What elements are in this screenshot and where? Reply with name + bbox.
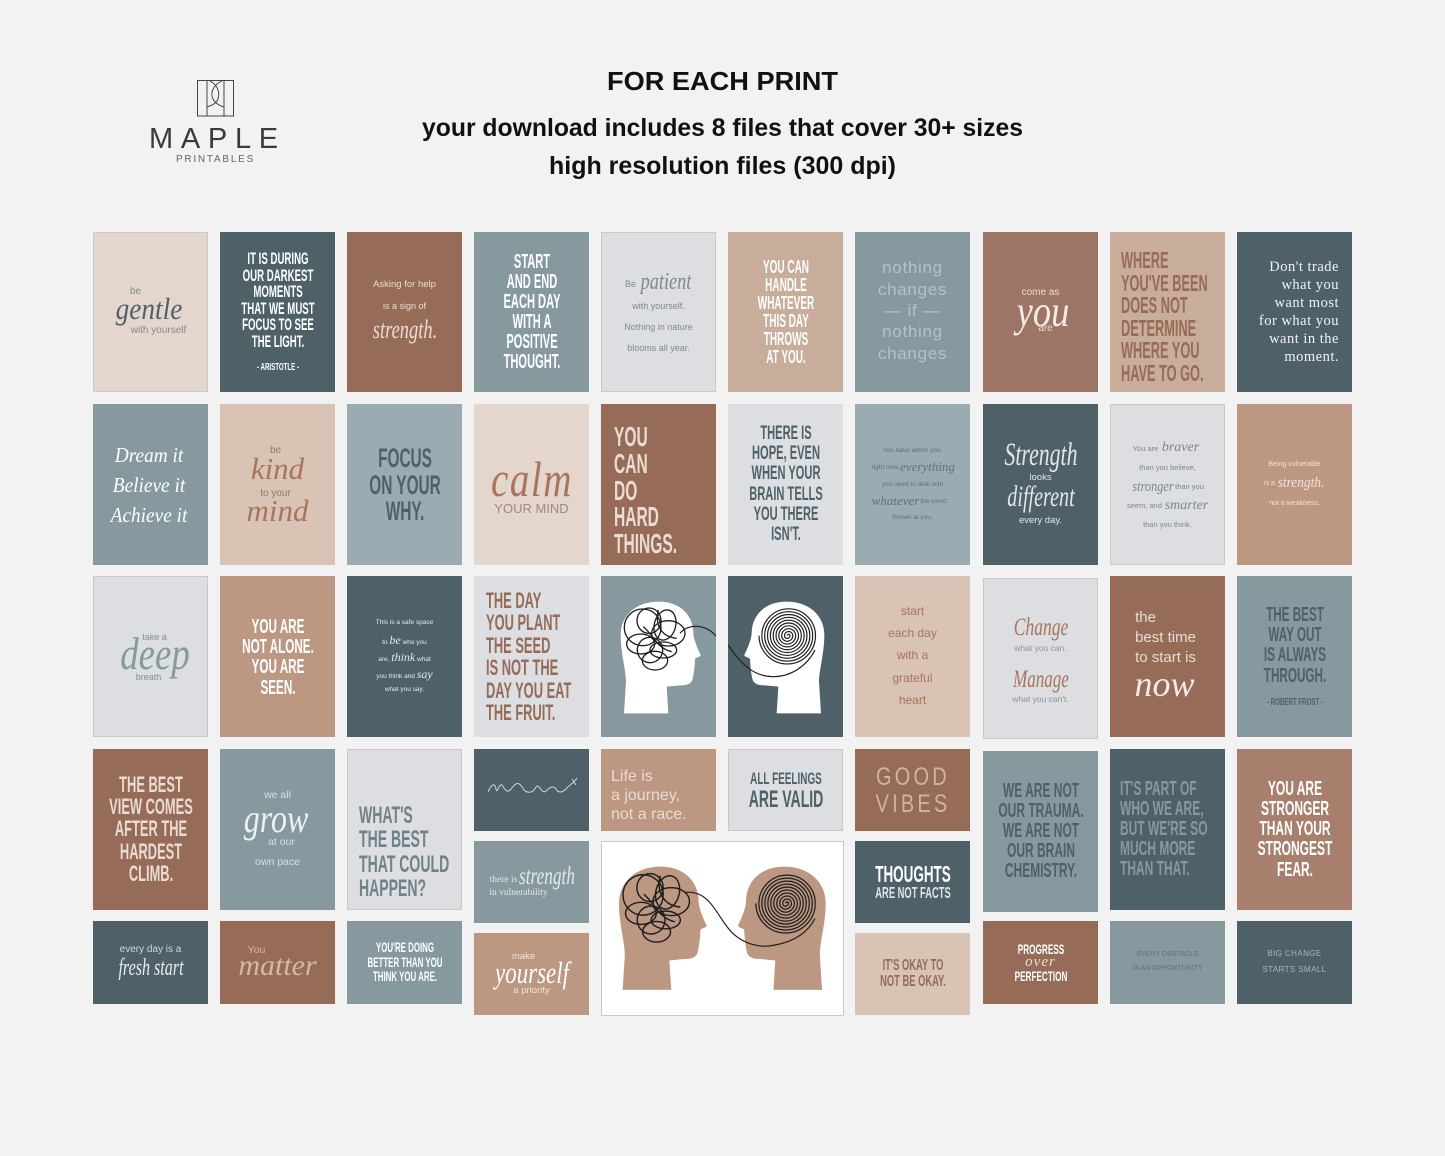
print: where you've been: HAVE TO GO. bbox=[1121, 360, 1204, 386]
print: don't trade: for what you bbox=[1259, 313, 1339, 329]
print: asking for help: strength. bbox=[372, 315, 437, 344]
print: we all grow: at our bbox=[268, 836, 295, 848]
wordmark MAPLE: MAPLE bbox=[149, 123, 286, 155]
print: you can handle whatever: AT YOU. bbox=[766, 347, 805, 367]
print: you are stronger: STRONGEST bbox=[1257, 838, 1332, 860]
print: it's part of who we are: THAN THAT. bbox=[1120, 858, 1190, 880]
subtitle: resolution: high resolution files (300 dpi) bbox=[549, 152, 896, 180]
print: make yourself a priority: a priority bbox=[513, 985, 550, 996]
print: dream it believe it achieve it bbox=[93, 404, 208, 565]
print: you can do hard things: CAN bbox=[614, 448, 648, 479]
print: there is hope: WHEN YOUR bbox=[751, 463, 820, 484]
print: it's part of who we are bbox=[1110, 749, 1225, 910]
print: there is strength in vulnerability: strength bbox=[519, 863, 574, 890]
print: you are stronger: FEAR. bbox=[1276, 859, 1312, 881]
print: the best way out: IS ALWAYS bbox=[1263, 644, 1326, 666]
print: start and end each day: START bbox=[513, 251, 550, 273]
print: all feelings are valid: ARE VALID bbox=[748, 786, 823, 813]
print: start each day with a grateful heart bbox=[855, 576, 970, 737]
print: the day you plant the seed: IS NOT THE bbox=[486, 655, 558, 680]
print: you are braver: stronger bbox=[1132, 479, 1173, 495]
print: you are not alone: YOU ARE bbox=[251, 656, 304, 678]
print: every obstacle bbox=[1110, 921, 1225, 1004]
print: change manage bbox=[983, 578, 1098, 739]
print: progress over perfection: PROGRESS bbox=[1017, 941, 1064, 957]
print: you have within you: the world bbox=[920, 498, 947, 505]
print: you can do hard things bbox=[601, 404, 716, 565]
print: dream it believe it achieve it: Dream it bbox=[114, 443, 183, 467]
print: the best way out: WAY OUT bbox=[1268, 624, 1321, 646]
print: it's part of who we are: IT'S PART OF bbox=[1120, 778, 1197, 800]
print: asking for help: is a sign of bbox=[383, 301, 426, 311]
print: you can handle whatever: THROWS bbox=[763, 329, 808, 349]
print: the day you plant the seed: YOU PLANT bbox=[486, 610, 560, 635]
print: be kind to your mind: mind bbox=[246, 493, 308, 528]
print: we are not our trauma bbox=[983, 751, 1098, 912]
print: you can do hard things: YOU bbox=[614, 421, 648, 452]
print: we are not our trauma: WE ARE NOT bbox=[1002, 820, 1079, 842]
print: start each day with a grateful heart: with a bbox=[897, 648, 928, 662]
print: the best view bbox=[93, 749, 208, 910]
print: heads connected illustration bbox=[601, 841, 844, 1016]
print: you are stronger: STRONGER bbox=[1260, 798, 1329, 820]
print: you can handle whatever: HANDLE bbox=[765, 275, 806, 295]
print: you can do hard things: THINGS. bbox=[614, 528, 677, 559]
print: Aristotle quote: - ARISTOTLE - bbox=[257, 361, 298, 373]
print: you are stronger: YOU ARE bbox=[1267, 778, 1322, 800]
print: be patient: patient bbox=[640, 269, 691, 295]
print: where you've been: WHERE bbox=[1121, 247, 1169, 273]
subtitle: files and sizes: your download includes 8 files that cover 30+ sizes bbox=[422, 114, 1023, 142]
print: don't trade: want in the bbox=[1269, 331, 1339, 347]
print: be gentle: gentle bbox=[115, 291, 182, 326]
print: the best way out bbox=[1237, 576, 1352, 737]
print: the best view: THE BEST bbox=[119, 772, 182, 797]
print: start each day with a grateful heart: grateful bbox=[892, 671, 933, 685]
print: there is strength in vulnerability: there is bbox=[490, 875, 517, 885]
print: script squiggle bbox=[474, 749, 589, 831]
print: strength looks different: different bbox=[1007, 480, 1074, 513]
print: you can handle whatever: THIS DAY bbox=[763, 311, 808, 331]
illustration: tangled and calm heads bbox=[619, 866, 826, 990]
print: you matter: matter bbox=[238, 949, 317, 982]
print: the best way out: THROUGH. bbox=[1263, 665, 1326, 687]
print: you are stronger: THAN YOUR bbox=[1259, 818, 1330, 840]
print: where you've been bbox=[1110, 232, 1225, 392]
print: thoughts are not facts: THOUGHTS bbox=[875, 861, 950, 887]
print: you're doing better: THINK YOU ARE. bbox=[372, 969, 437, 984]
print: big change starts small bbox=[1237, 921, 1352, 1004]
print: where you've been: DETERMINE bbox=[1121, 315, 1196, 341]
print: calm your mind: calm bbox=[490, 451, 573, 507]
print: the best way out: THE BEST bbox=[1266, 604, 1323, 626]
heading text bbox=[422, 66, 1023, 180]
print: thoughts are not facts: ARE NOT FACTS bbox=[875, 885, 950, 902]
print: being vulnerable bbox=[1237, 404, 1352, 565]
print: every obstacle: EVERY OBSTACLE bbox=[1136, 951, 1199, 958]
print: every obstacle: IS AN OPPORTUNITY bbox=[1132, 965, 1203, 972]
print: come as you are: are bbox=[1038, 323, 1053, 334]
print: come as you are: you bbox=[1016, 287, 1069, 336]
print: we are not our trauma: CHEMISTRY. bbox=[1004, 860, 1077, 882]
print: start each day with a grateful heart: heart bbox=[899, 693, 926, 707]
print: be kind to your mind: kind bbox=[251, 451, 304, 486]
print: there is hope: THERE IS bbox=[760, 423, 811, 444]
print: every day is a fresh start: fresh start bbox=[118, 955, 183, 981]
print: safe space bbox=[347, 576, 462, 737]
print: the best time to start is now bbox=[1110, 576, 1225, 737]
print: the day you plant the seed: THE FRUIT. bbox=[486, 700, 555, 725]
print: take a deep breath: deep bbox=[120, 628, 189, 679]
print: there is strength in vulnerability bbox=[474, 841, 589, 923]
print: good vibes bbox=[855, 749, 970, 831]
print: change manage: Manage bbox=[1013, 666, 1068, 693]
print: every day is a fresh start: every day is a bbox=[120, 944, 181, 955]
print: the best way out: - ROBERT FROST - bbox=[1267, 696, 1322, 708]
print: we all grow bbox=[220, 749, 335, 910]
print: you are not alone: SEEN. bbox=[260, 677, 295, 699]
print: Aristotle quote bbox=[220, 232, 335, 392]
print: dream it believe it achieve it: Achieve it bbox=[110, 503, 187, 527]
illustration: spiral head bbox=[728, 602, 824, 714]
print: you have within you: you need to deal with bbox=[882, 481, 943, 488]
print: change manage: what you can. bbox=[1014, 643, 1067, 653]
print: progress over perfection bbox=[983, 921, 1098, 1004]
print: you're doing better bbox=[347, 921, 462, 1004]
print: we all grow: we all bbox=[264, 789, 291, 801]
print: focus on your why: FOCUS bbox=[378, 443, 431, 473]
print: all feelings are valid: ALL FEELINGS bbox=[750, 769, 821, 788]
print: make yourself a priority bbox=[474, 933, 589, 1015]
print: you have within you: everything bbox=[900, 459, 955, 474]
print: you matter: You bbox=[248, 944, 265, 956]
print: nothing changes: changes bbox=[878, 344, 947, 363]
print: what's the best: HAPPEN? bbox=[359, 875, 426, 902]
print: safe space: what you say. bbox=[385, 686, 424, 693]
print: nothing changes: nothing bbox=[882, 258, 943, 277]
print: the best view: VIEW COMES bbox=[109, 794, 192, 819]
print: come as you are: come as bbox=[1022, 287, 1059, 298]
print: asking for help: Asking for help bbox=[373, 279, 436, 290]
print: there is hope: YOU THERE bbox=[753, 504, 818, 525]
print: all feelings are valid bbox=[728, 749, 843, 831]
print: it's part of who we are: MUCH MORE bbox=[1120, 838, 1195, 860]
print: asking for help bbox=[347, 232, 462, 392]
print: strength looks different bbox=[983, 404, 1098, 565]
print: you have within you: whatever bbox=[872, 493, 919, 508]
print: the day you plant the seed: THE DAY bbox=[486, 588, 541, 613]
print: there is hope: HOPE, EVEN bbox=[752, 443, 819, 464]
print: be patient: Nothing in nature bbox=[624, 322, 693, 332]
print: don't trade: what you bbox=[1281, 277, 1339, 293]
print: be gentle bbox=[93, 232, 208, 392]
print: we are not our trauma: OUR BRAIN bbox=[1006, 840, 1075, 862]
print: nothing changes: — if — bbox=[884, 301, 941, 320]
print: make yourself a priority: make bbox=[512, 951, 535, 962]
print: you can do hard things: HARD bbox=[614, 501, 659, 532]
print: be patient: blooms all year. bbox=[627, 343, 690, 353]
print: it's okay to not be okay: NOT BE OKAY. bbox=[880, 973, 945, 990]
print: strength looks different: looks bbox=[1029, 472, 1052, 483]
print: there is strength in vulnerability: in vulnerability bbox=[489, 888, 548, 898]
print: change manage: Change bbox=[1013, 614, 1068, 641]
print: start each day with a grateful heart: start bbox=[901, 604, 924, 618]
print: Aristotle quote: OUR DARKEST bbox=[242, 267, 313, 285]
print: Aristotle quote: IT IS DURING bbox=[247, 250, 308, 268]
print: be patient: with yourself. bbox=[632, 301, 685, 311]
print: the day you plant the seed: THE SEED bbox=[486, 633, 550, 658]
print: you can handle whatever: YOU CAN bbox=[762, 257, 809, 277]
print: Aristotle quote: THAT WE MUST bbox=[241, 300, 314, 318]
print: Aristotle quote: MOMENTS bbox=[253, 283, 302, 301]
print: progress over perfection: PERFECTION bbox=[1014, 968, 1067, 984]
print: you have within you bbox=[855, 404, 970, 565]
print: Aristotle quote: FOCUS TO SEE bbox=[242, 316, 313, 334]
print: don't trade bbox=[1237, 232, 1352, 392]
print: be patient bbox=[601, 232, 716, 392]
print: being vulnerable: strength. bbox=[1277, 475, 1324, 491]
print: being vulnerable: is a bbox=[1264, 480, 1275, 487]
print: it's okay to not be okay bbox=[855, 933, 970, 1015]
print: you are stronger bbox=[1237, 749, 1352, 910]
print: safe space: to be who you bbox=[382, 633, 427, 647]
print: you can handle whatever bbox=[728, 232, 843, 392]
print: what's the best: THAT COULD bbox=[359, 851, 449, 878]
print: you are braver: You are bbox=[1133, 444, 1158, 453]
print: what's the best bbox=[347, 749, 462, 910]
print: being vulnerable: Being vulnerable bbox=[1268, 461, 1321, 468]
print: nothing changes: nothing bbox=[882, 322, 943, 341]
print: calm your mind bbox=[474, 404, 589, 565]
print: start and end each day: EACH DAY bbox=[503, 291, 560, 313]
print: the day you plant the seed bbox=[474, 576, 589, 737]
print: it's part of who we are: BUT WE'RE SO bbox=[1120, 818, 1208, 840]
print: the day you plant the seed: DAY YOU EAT bbox=[486, 678, 571, 703]
print: be gentle: with yourself bbox=[131, 325, 186, 336]
print: take a deep breath: breath bbox=[136, 672, 161, 682]
print: there is hope: BRAIN TELLS bbox=[749, 484, 822, 505]
icon: squiggle line bbox=[488, 778, 578, 793]
print: the best view: HARDEST bbox=[119, 839, 182, 864]
print: the best view: AFTER THE bbox=[114, 816, 187, 841]
print: be patient: Be bbox=[625, 279, 636, 289]
print: be kind to your mind: to your bbox=[260, 488, 291, 499]
print: focus on your why: WHY. bbox=[385, 496, 424, 526]
print: you can do hard things: DO bbox=[614, 475, 637, 506]
print: it's part of who we are: WHO WE ARE, bbox=[1120, 798, 1204, 820]
print: what's the best: WHAT'S bbox=[359, 802, 413, 829]
print: head with calm spiral bbox=[728, 576, 843, 737]
title: FOR EACH PRINT bbox=[607, 66, 838, 96]
print: don't trade: Don't trade bbox=[1269, 259, 1339, 275]
print: focus on your why bbox=[347, 404, 462, 565]
print: start and end each day: POSITIVE bbox=[506, 331, 557, 353]
print: focus on your why: ON YOUR bbox=[369, 470, 440, 500]
print: you matter bbox=[220, 921, 335, 1004]
print: you have within you: right now, bbox=[872, 464, 899, 471]
print: the best time to start is now: to start is bbox=[1135, 649, 1196, 666]
print: where you've been: DOES NOT bbox=[1121, 292, 1188, 318]
print: you're doing better: BETTER THAN YOU bbox=[367, 955, 442, 970]
print: where you've been: WHERE YOU bbox=[1121, 337, 1199, 363]
print: you are braver: smarter bbox=[1165, 498, 1208, 513]
print: you are braver: braver bbox=[1162, 440, 1199, 455]
print: be kind to your mind bbox=[220, 404, 335, 565]
print: take a deep breath bbox=[93, 576, 208, 737]
print: the best view: CLIMB. bbox=[128, 861, 173, 886]
print: you are braver: seem, and bbox=[1127, 501, 1162, 510]
print: don't trade: moment. bbox=[1284, 349, 1339, 365]
print: good vibes: GOOD bbox=[876, 763, 949, 791]
print: the best time to start is now: the bbox=[1135, 609, 1156, 626]
print: safe space: you think and say bbox=[376, 667, 433, 681]
logo: Maple Printables bbox=[149, 80, 286, 165]
print: come as you are bbox=[983, 232, 1098, 392]
print: you are braver: than you believe, bbox=[1139, 463, 1196, 472]
print: we all grow: own pace bbox=[255, 856, 300, 868]
logo mark bbox=[197, 80, 234, 116]
print: nothing changes bbox=[855, 232, 970, 392]
print: start and end each day: WITH A bbox=[512, 311, 551, 333]
print: being vulnerable: not a weakness. bbox=[1269, 500, 1320, 507]
print: you are braver: than you think. bbox=[1143, 520, 1192, 529]
print: every day is a fresh start bbox=[93, 921, 208, 1004]
print: start and end each day: THOUGHT. bbox=[503, 351, 560, 373]
print: thoughts are not facts bbox=[855, 841, 970, 923]
print: big change starts small: STARTS SMALL bbox=[1262, 965, 1327, 974]
print: don't trade: want most bbox=[1274, 295, 1339, 311]
print: you are not alone bbox=[220, 576, 335, 737]
print: head with tangled scribble bbox=[601, 576, 716, 737]
print: calm your mind: YOUR MIND bbox=[494, 501, 569, 516]
print: make yourself a priority: yourself bbox=[495, 955, 568, 990]
print: you are not alone: NOT ALONE. bbox=[242, 636, 313, 658]
print: we are not our trauma: OUR TRAUMA. bbox=[998, 800, 1083, 822]
print: start and end each day: AND END bbox=[506, 271, 557, 293]
print: you're doing better: YOU'RE DOING bbox=[375, 940, 434, 955]
print: you can handle whatever: WHATEVER bbox=[757, 293, 814, 313]
print: be kind to your mind: be bbox=[270, 445, 281, 456]
print: safe space: are, think what bbox=[378, 650, 431, 664]
print: start and end each day bbox=[474, 232, 589, 392]
print: you are not alone: YOU ARE bbox=[251, 616, 304, 638]
print: change manage: what you can't. bbox=[1012, 694, 1069, 704]
wordmark PRINTABLES: PRINTABLES bbox=[176, 154, 255, 165]
illustration: tangled head bbox=[620, 602, 716, 714]
print: there is hope bbox=[728, 404, 843, 565]
print: we all grow: grow bbox=[243, 796, 308, 841]
print: strength looks different: Strength bbox=[1004, 437, 1077, 473]
print: life is a journey: Life is bbox=[611, 768, 653, 785]
print: take a deep breath: take a bbox=[142, 632, 167, 642]
print: you are braver bbox=[1110, 404, 1225, 565]
print: the best time to start is now: now bbox=[1134, 664, 1194, 704]
print: you are braver: than you bbox=[1175, 482, 1204, 491]
print: there is hope: ISN'T. bbox=[771, 524, 800, 545]
print: dream it believe it achieve it: Believe it bbox=[112, 473, 185, 497]
print: safe space: This is a safe space bbox=[376, 619, 433, 626]
print: be gentle: be bbox=[130, 286, 141, 297]
print: big change starts small: BIG CHANGE bbox=[1267, 949, 1322, 958]
print: you have within you: You have within you, bbox=[883, 447, 942, 454]
print: Aristotle quote: THE LIGHT. bbox=[251, 333, 304, 351]
print: strength looks different: every day. bbox=[1019, 515, 1062, 526]
print: what's the best: THE BEST bbox=[359, 826, 428, 853]
print: good vibes: VIBES bbox=[875, 790, 950, 818]
print: start each day with a grateful heart: each day bbox=[888, 626, 937, 640]
print: life is a journey bbox=[601, 749, 716, 831]
print: where you've been: YOU'VE BEEN bbox=[1121, 270, 1208, 296]
print: nothing changes: changes bbox=[878, 280, 947, 299]
print: you have within you: throws at you. bbox=[892, 514, 933, 521]
print: life is a journey: not a race. bbox=[611, 806, 687, 823]
print: life is a journey: a journey, bbox=[611, 787, 680, 804]
print: the best time to start is now: best time bbox=[1135, 629, 1196, 646]
print: it's okay to not be okay: IT'S OKAY TO bbox=[882, 957, 943, 974]
print: progress over perfection: over bbox=[1025, 954, 1056, 970]
print: we are not our trauma: WE ARE NOT bbox=[1002, 780, 1079, 802]
